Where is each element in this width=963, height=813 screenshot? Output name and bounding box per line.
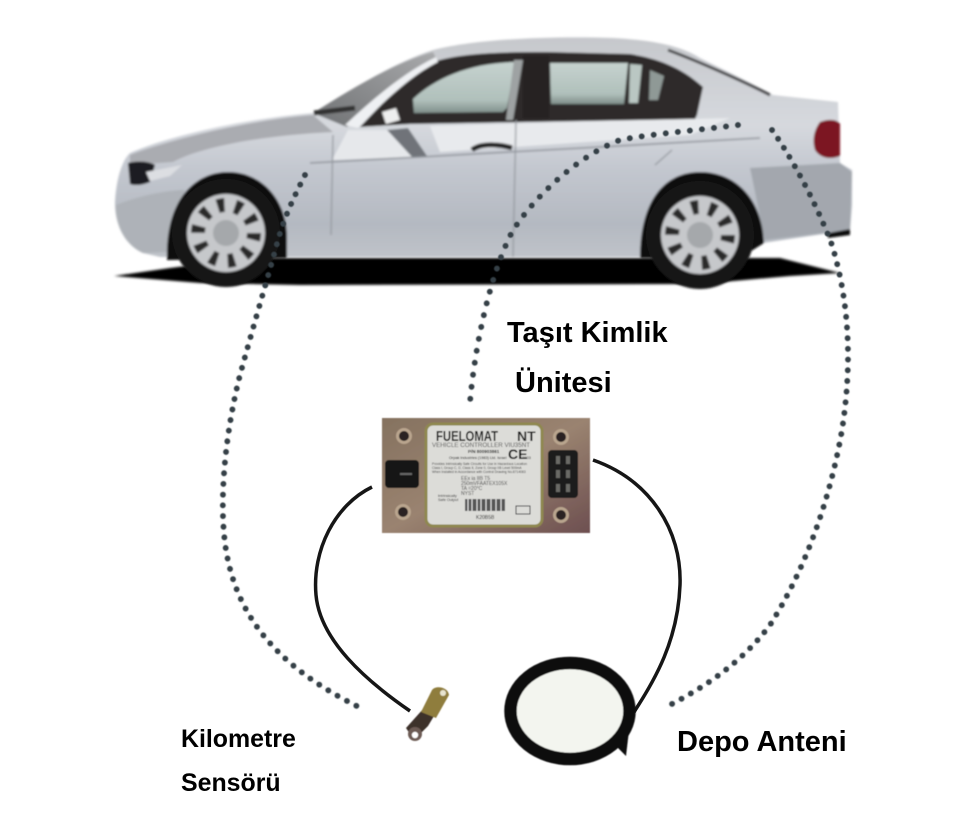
label: Taşıt Kimlik Ünitesi: Taşıt Kimlik: [507, 317, 668, 349]
label: Kilometre Sensörü: [181, 725, 296, 797]
door character line: [310, 138, 760, 163]
rear window: [550, 63, 628, 104]
tank antenna ring: [510, 663, 630, 759]
dotted line: unit to car: [470, 125, 738, 402]
product label: K20B5B: [476, 515, 495, 521]
window frame: [360, 52, 703, 127]
product label: TA =20°C: [461, 486, 483, 492]
right connector: [548, 450, 578, 498]
rear wheel: [640, 172, 764, 289]
front wheel: [167, 172, 287, 287]
door seams: [331, 120, 672, 257]
product label: NT: [517, 428, 536, 444]
label: Kilometre Sensörü: Sensörü: [181, 769, 281, 797]
car body: [115, 37, 852, 257]
car shadow: [114, 258, 840, 285]
product label: 250mVFAATEX105X: [461, 481, 508, 487]
mirror: [382, 108, 400, 124]
product label: Class I, Group C, D, Class II, Zone 0, Group IIB Level 500mA: [432, 466, 522, 470]
mounting holes: [396, 430, 568, 522]
door pillar chrome: [506, 60, 523, 120]
windshield: [313, 52, 436, 127]
metal mounting plate: [382, 418, 590, 533]
rear quarter window: [629, 64, 642, 103]
product label: Orpak Industries (1983) Ltd. Israel: [449, 456, 507, 460]
rear bumper lower edge: [828, 229, 850, 238]
product label: EEx ia IIB T5: [461, 476, 490, 482]
product label: Provides Intrinsically Safe Circuits for Use in Hazardous Location: [432, 462, 527, 466]
product label: NYST: [461, 491, 474, 497]
roof rail: [668, 50, 770, 95]
tail light: [814, 120, 840, 158]
label: Taşıt Kimlik Ünitesi: Ünitesi: [515, 366, 612, 399]
label: Depo Anteni: Depo Anteni: [677, 726, 847, 758]
left connector: [385, 460, 419, 488]
dotted line: tank antenna to car: [664, 130, 848, 708]
vehicle controller unit: [382, 418, 590, 533]
product label: FUELOMAT: [436, 428, 498, 445]
dotted line: odometer sensor to car: [223, 175, 365, 710]
barcode: [465, 499, 505, 511]
hood shade: [130, 115, 333, 165]
product label: 2003: [522, 455, 532, 460]
A pillar highlight: [345, 57, 438, 128]
B pillar: [523, 56, 549, 118]
product label: [426, 424, 542, 526]
product label: Intrinsically: [438, 494, 457, 498]
headlight: [128, 162, 155, 185]
cable: antenna to unit: [593, 460, 680, 712]
front bumper shade: [116, 190, 185, 253]
product label: CE: [508, 446, 527, 462]
front window: [413, 62, 515, 113]
rear quarter shade: [750, 163, 852, 240]
product label: Safe Output: [438, 498, 459, 502]
door handle: [472, 145, 512, 150]
cable: sensor to unit: [316, 487, 410, 711]
belt panel: [332, 130, 412, 160]
small box mark: [516, 506, 530, 514]
label: Kilometre Sensörü: Kilometre: [181, 725, 296, 753]
product label: VEHICLE CONTROLLER VIU35NT: [432, 443, 530, 449]
wiper: [314, 108, 355, 113]
product label: When Installed in Accordance with Control Drawing No.8714083: [432, 470, 526, 474]
label: Taşıt Kimlik Ünitesi: [507, 317, 668, 399]
odometer sensor: [406, 687, 449, 741]
car: [114, 37, 852, 289]
product label: P/N 800903861: [468, 449, 500, 454]
